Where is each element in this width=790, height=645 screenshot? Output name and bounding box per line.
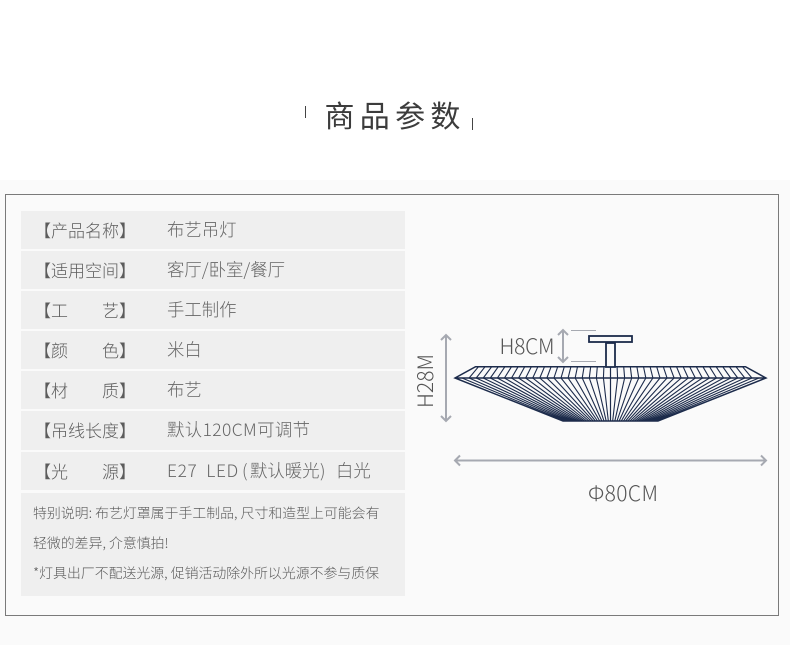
row: cable length	[21, 411, 405, 450]
lamp canopy and stem	[589, 336, 632, 367]
label: H28M: H28M	[410, 354, 440, 408]
row: light source: (	[242, 458, 247, 483]
row: product name: 布艺吊灯	[167, 217, 237, 242]
page background panel	[0, 180, 790, 645]
label: diameter: Φ80CM	[588, 478, 658, 508]
row: cable length: 默认120CM可调节	[167, 417, 310, 442]
arrow: overall height	[441, 335, 451, 421]
row: colour: 【颜 色】	[34, 337, 136, 362]
arrow: diameter	[455, 456, 766, 466]
note line 1: 特别说明: 布艺灯罩属于手工制品, 尺寸和造型上可能会有	[33, 503, 379, 523]
row: light source: 【光 源】	[34, 458, 136, 483]
row: light source	[21, 452, 405, 490]
row: applicable space: 客厅/卧室/餐厅	[167, 257, 285, 282]
row: applicable space	[21, 251, 405, 289]
panel: special notes	[21, 493, 405, 596]
row: light source: )	[320, 458, 325, 483]
row: craft: 【工 艺】	[34, 297, 136, 322]
note line 3: *灯具出厂不配送光源, 促销活动除外所以光源不参与质保	[33, 563, 379, 583]
row: material	[21, 371, 405, 409]
row: material: 【材 质】	[34, 377, 136, 402]
panel: parameters frame	[5, 194, 779, 616]
row: cable length: 【吊线长度】	[34, 417, 136, 442]
title right tick	[472, 118, 473, 130]
row: craft	[21, 291, 405, 329]
note line 2: 轻微的差异, 介意慎拍!	[33, 533, 169, 553]
row: product name	[21, 211, 405, 249]
label: H8CM: H8CM	[500, 331, 554, 361]
row: colour	[21, 331, 405, 369]
row: light source: 默认暖光	[250, 458, 320, 483]
title left tick	[305, 106, 306, 118]
arrow: canopy height	[558, 330, 596, 362]
row: light source: 白光	[336, 458, 371, 483]
row: craft: 手工制作	[167, 297, 237, 322]
row: colour: 米白	[167, 337, 202, 362]
row: product name: 【产品名称】	[34, 217, 136, 242]
row: applicable space: 【适用空间】	[34, 257, 136, 282]
row: light source: E27 LED	[167, 458, 239, 483]
lamp shade	[455, 367, 766, 421]
title text: 商品参数	[324, 92, 466, 136]
row: material: 布艺	[167, 377, 202, 402]
